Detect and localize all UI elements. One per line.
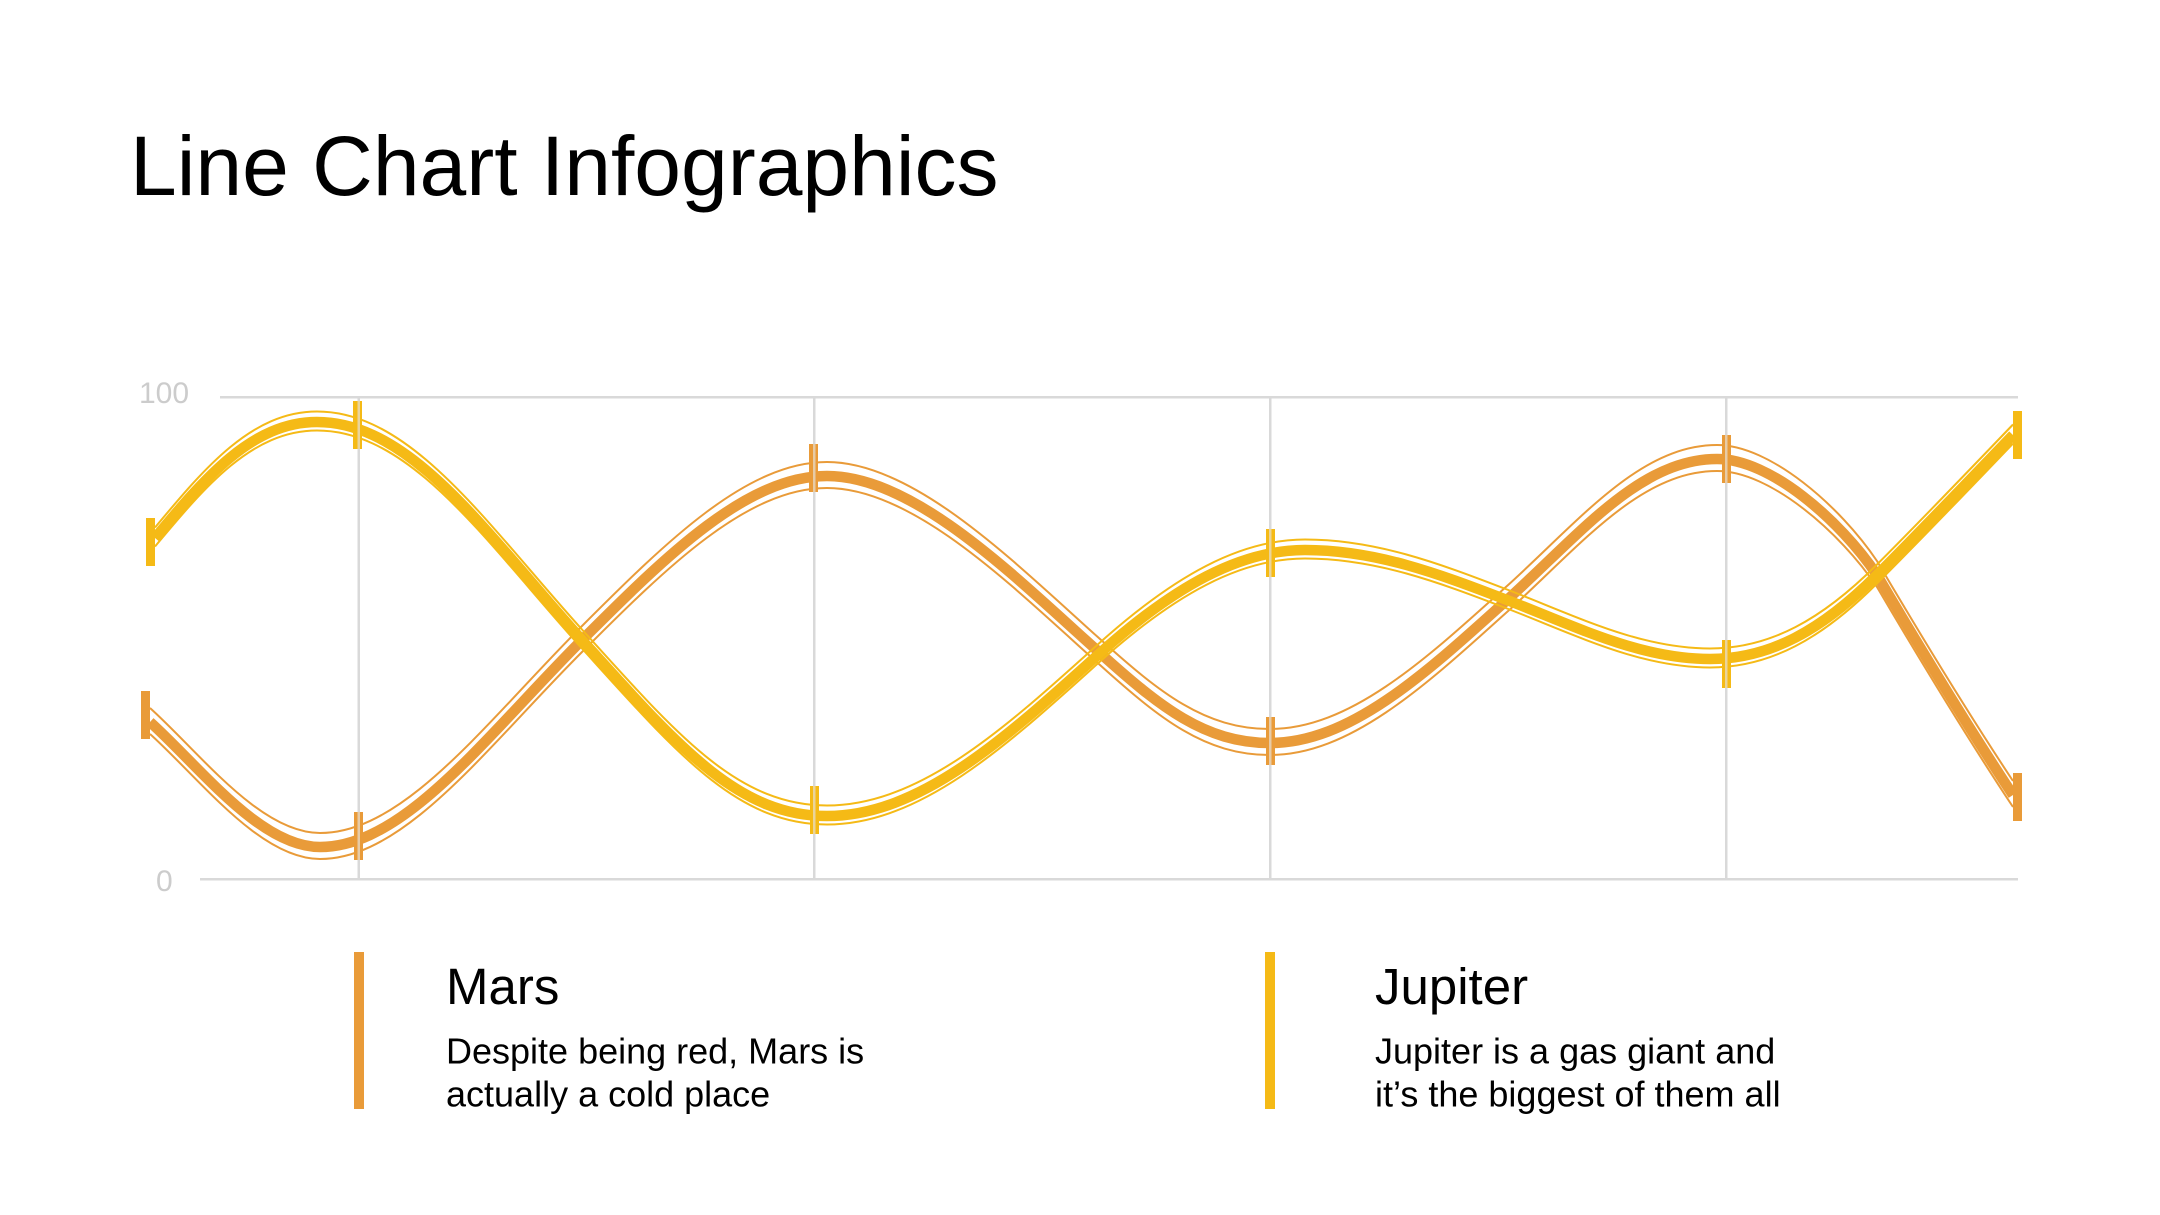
chart grid: [200, 396, 2018, 880]
title: Line Chart Infographics: [130, 119, 999, 213]
Jupiter description: it’s the biggest of them all: [1375, 1074, 1781, 1114]
axis label: 0: 0: [156, 865, 173, 898]
Mars description: Despite being red, Mars is: [446, 1030, 864, 1072]
line chart: [139, 377, 2022, 898]
Jupiter colour bar: [1265, 952, 1275, 1109]
Jupiter tick marks: [146, 401, 2022, 834]
series: Mars: [150, 445, 2013, 859]
Jupiter heading: Jupiter: [1375, 958, 1528, 1015]
grid overlay on ticks: [358, 401, 1728, 860]
Mars heading: Mars: [446, 958, 559, 1015]
axis label: 100: 100: [139, 377, 189, 410]
Jupiter description: Jupiter is a gas giant and: [1375, 1030, 1775, 1072]
series: Jupiter: [155, 412, 2013, 824]
legend: Mars: [354, 952, 864, 1114]
Mars tick marks: [141, 435, 2022, 860]
Mars colour bar: [354, 952, 364, 1109]
Mars description: actually a cold place: [446, 1074, 770, 1114]
legend: Jupiter: [1265, 952, 1781, 1114]
